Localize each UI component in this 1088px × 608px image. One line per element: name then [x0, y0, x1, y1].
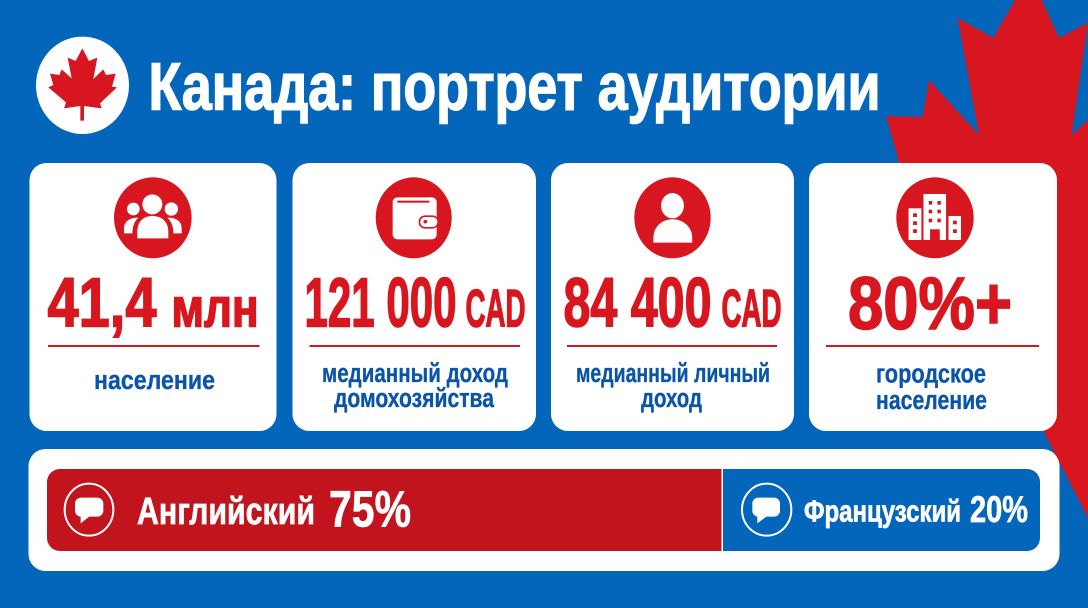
value: 84 400 [564, 264, 712, 342]
icon: buildings [896, 177, 974, 258]
label: Французский [804, 494, 961, 528]
label: городское [876, 358, 986, 388]
label: медианный личный [576, 358, 770, 388]
title: Канада: портрет аудитории [148, 50, 880, 124]
value [48, 264, 258, 342]
panel: urban population [809, 163, 1057, 431]
value: 75% [329, 480, 411, 538]
panel: personal income [551, 163, 794, 431]
label: население [94, 365, 215, 395]
value: CAD [722, 280, 782, 338]
label [576, 358, 770, 413]
label: доход [641, 383, 702, 413]
panel: household income [292, 163, 536, 431]
label: Английский [137, 491, 315, 533]
value: 121 000 [304, 264, 456, 342]
icon: wallet [376, 177, 452, 258]
bar: French [723, 469, 1040, 551]
panel: languages [28, 449, 1060, 571]
background maple leaf [886, 0, 1088, 518]
label: медианный доход [322, 358, 508, 388]
value: 80%+ [848, 262, 1012, 345]
value: млн [172, 276, 258, 338]
label: население [876, 385, 987, 415]
value: 20% [970, 489, 1028, 530]
value: CAD [466, 280, 526, 338]
header [36, 37, 880, 134]
label: домохозяйства [334, 383, 495, 413]
icon: person [634, 177, 711, 258]
bar: English [47, 469, 722, 551]
icon: speech bubble [742, 484, 791, 536]
logo: maple leaf in circle [36, 37, 129, 134]
value: 41,4 [48, 264, 157, 342]
panel: population [30, 163, 276, 431]
icon: speech bubble [65, 484, 113, 536]
label [322, 358, 508, 413]
icon: people [114, 177, 192, 258]
label [876, 358, 987, 415]
